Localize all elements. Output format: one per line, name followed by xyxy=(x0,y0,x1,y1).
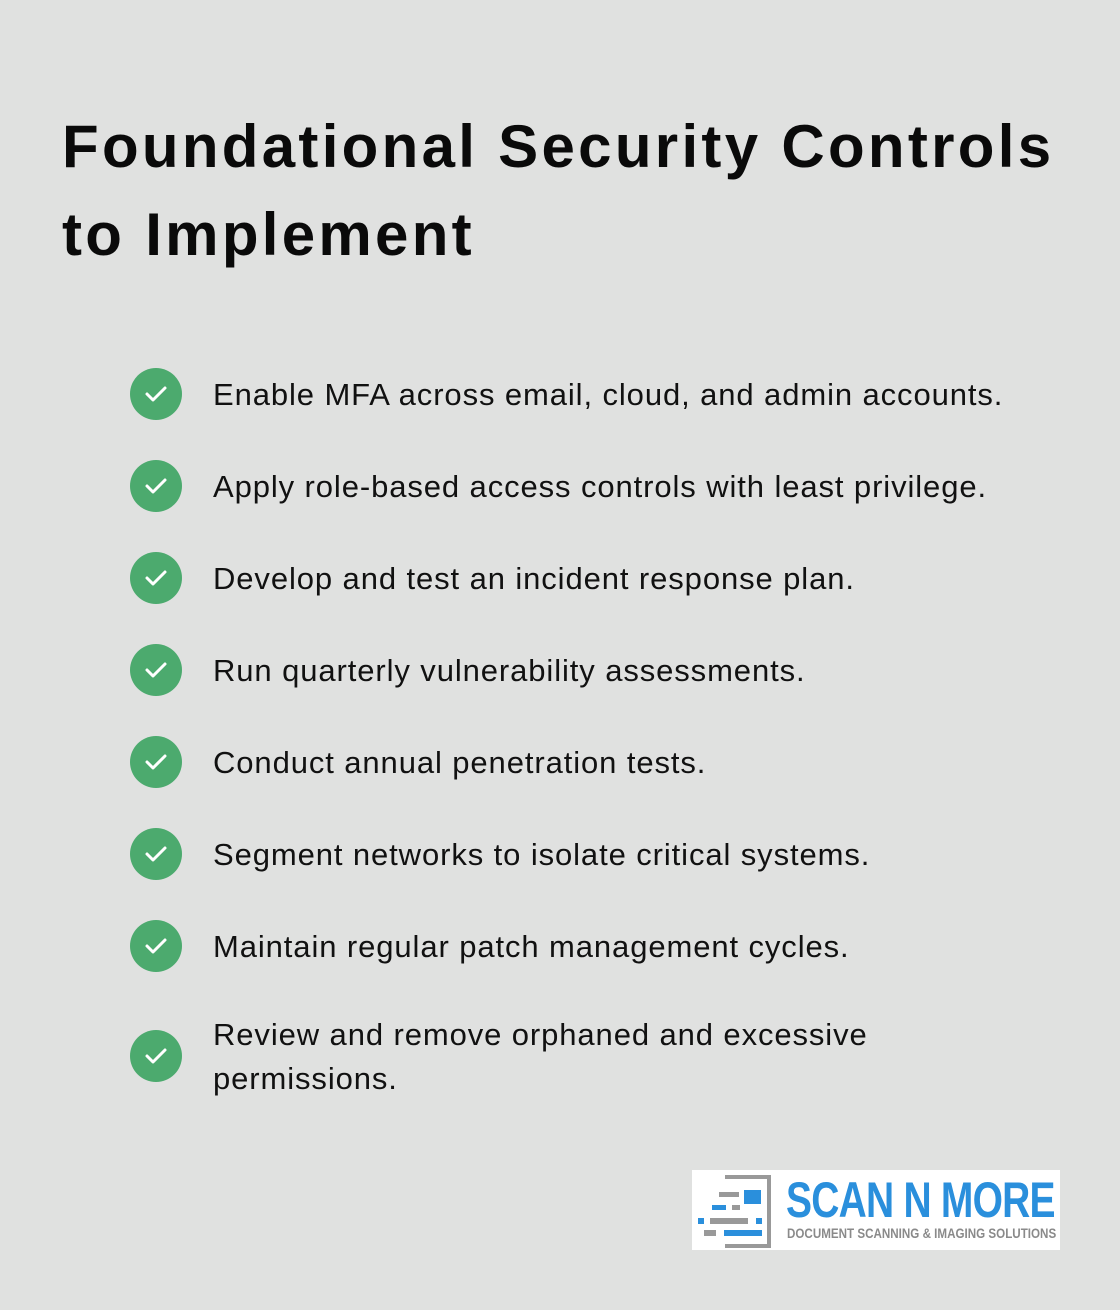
item 8: permissions. xyxy=(213,1061,398,1096)
icon: scanner xyxy=(698,1175,771,1248)
item 4: Run quarterly vulnerability assessments. xyxy=(213,653,806,688)
item 7: Maintain regular patch management cycles. xyxy=(213,929,850,964)
item 8: Review and remove orphaned and excessive xyxy=(213,1017,868,1052)
title xyxy=(62,113,1054,268)
item 8 xyxy=(130,1017,868,1096)
item 2 xyxy=(130,460,987,512)
item 7 xyxy=(130,920,850,972)
item 1: Enable MFA across email, cloud, and admin accounts. xyxy=(213,377,1003,412)
logo xyxy=(692,1170,1060,1250)
item 6: Segment networks to isolate critical systems. xyxy=(213,837,870,872)
item 1 xyxy=(130,368,1003,420)
item 6 xyxy=(130,828,870,880)
item 3 xyxy=(130,552,855,604)
item 2: Apply role-based access controls with least privilege. xyxy=(213,469,987,504)
title: Foundational Security Controls xyxy=(62,113,1054,180)
item 5 xyxy=(130,736,706,788)
item 5: Conduct annual penetration tests. xyxy=(213,745,706,780)
logo text: SCAN N MORE xyxy=(786,1172,1055,1228)
logo: DOCUMENT SCANNING & IMAGING SOLUTIONS xyxy=(787,1225,1056,1241)
item 3: Develop and test an incident response plan. xyxy=(213,561,855,596)
item 4 xyxy=(130,644,806,696)
title: to Implement xyxy=(62,201,475,268)
